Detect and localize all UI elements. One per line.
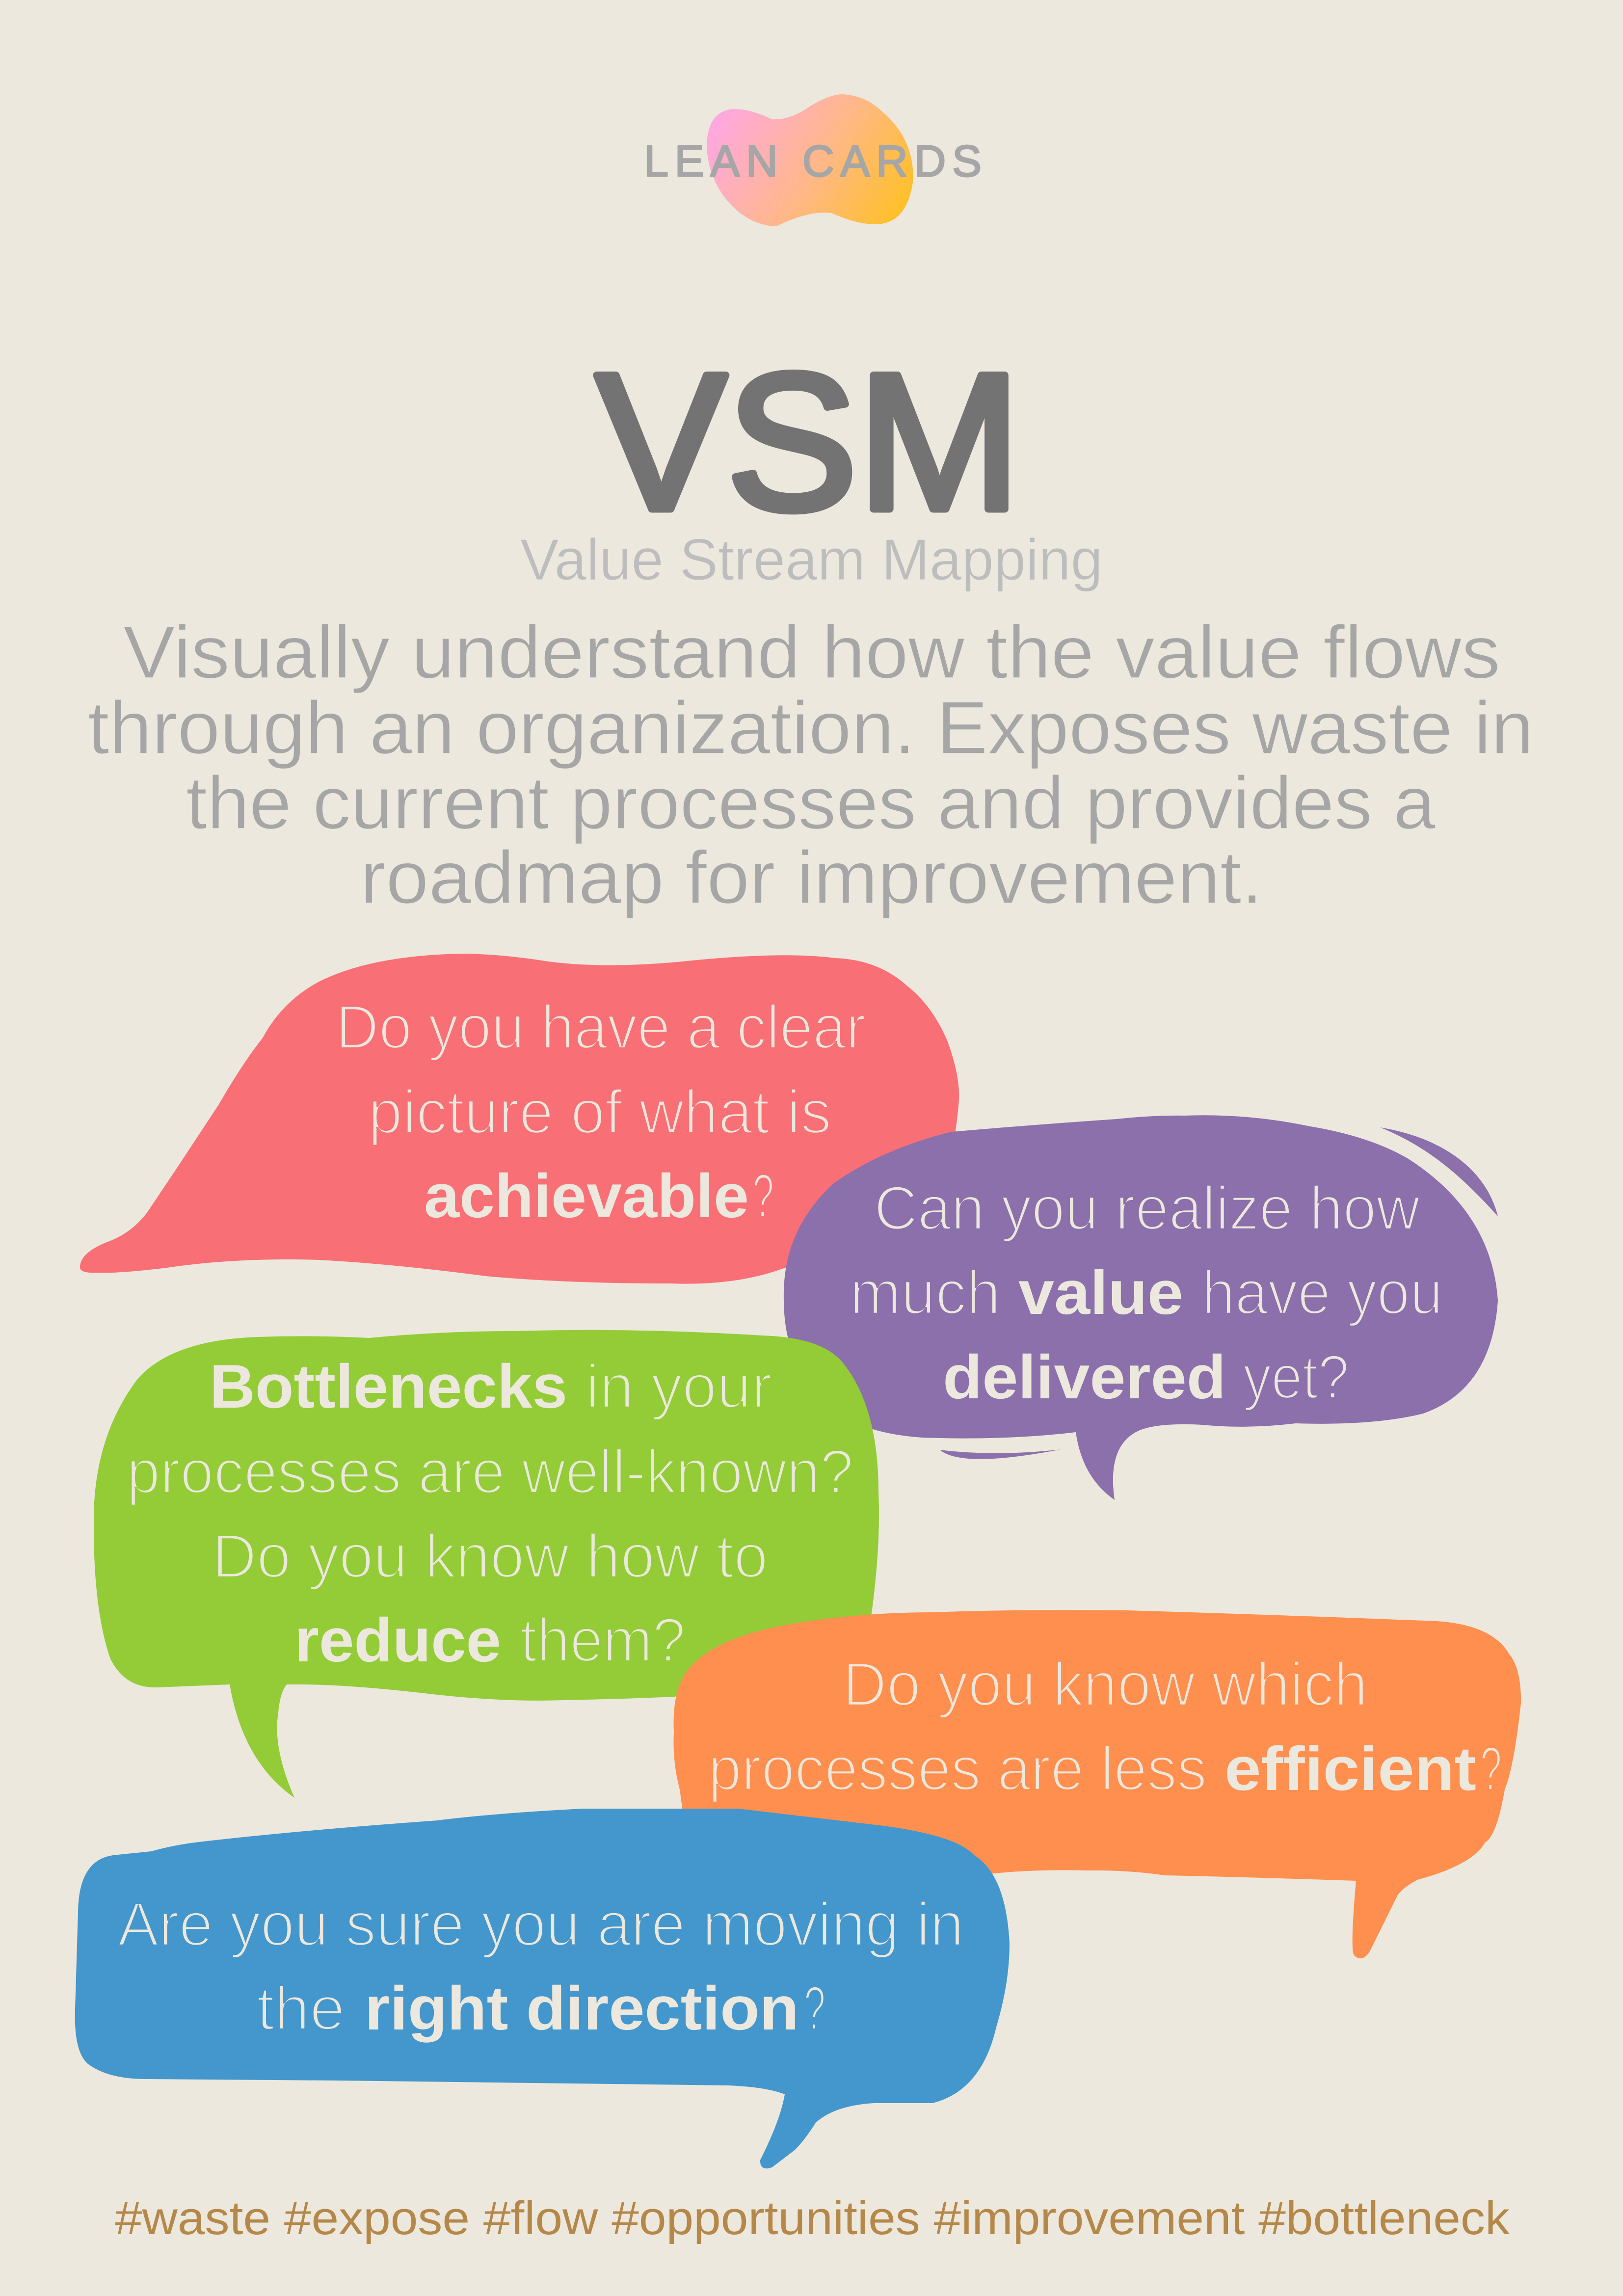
bubble shape: orange xyxy=(673,1610,1521,1958)
logo: lean cards xyxy=(644,94,982,226)
panel: green speech bubble xyxy=(94,1330,879,1798)
panel: orange speech bubble xyxy=(673,1610,1521,1958)
bubble text: achievable: ? xyxy=(752,1161,774,1230)
description paragraph: through an organization. Exposes waste in xyxy=(88,686,1534,770)
bubble text: efficient: ? xyxy=(1480,1734,1502,1803)
description paragraph: the current processes and provides a xyxy=(186,761,1436,845)
bubble text: bottlenecks: Bottlenecks xyxy=(210,1352,567,1421)
bubble text: bottlenecks: in your xyxy=(585,1352,772,1421)
bubble text: value delivered xyxy=(850,1174,1443,1412)
panel: blue speech bubble xyxy=(75,1809,1010,2168)
bubble text: efficient: processes are less xyxy=(708,1734,1207,1803)
bubble text: achievable: Do you have a clear xyxy=(336,992,866,1062)
bubble text: achievable: achievable xyxy=(424,1161,749,1230)
bubble shape: blue xyxy=(75,1809,1010,2168)
bubble text: value delivered: delivered xyxy=(943,1342,1226,1412)
bubble text: right direction: the xyxy=(257,1974,345,2043)
bubble text: right direction xyxy=(118,1890,964,2043)
bubble text: value delivered: Can you realize how xyxy=(874,1174,1420,1243)
bubble text: bottlenecks: reduce xyxy=(294,1605,501,1675)
bubble text: right direction: right direction xyxy=(365,1974,799,2043)
bubble text: efficient: efficient xyxy=(1224,1734,1476,1803)
bubble text: bottlenecks xyxy=(127,1352,853,1675)
bubble text: achievable: picture of what is xyxy=(368,1077,831,1147)
bubble shape: pink xyxy=(80,954,959,1284)
title: VSM xyxy=(596,333,1021,550)
bubble text: value delivered: have you xyxy=(1202,1258,1443,1327)
description paragraph: Visually understand how the value flows xyxy=(123,611,1500,694)
bubble text: achievable xyxy=(336,992,866,1230)
bubble shape: purple xyxy=(784,1115,1498,1500)
bubble text: bottlenecks: Do you know how to xyxy=(212,1522,768,1591)
decorative crescent top right xyxy=(1380,1127,1498,1216)
bubble text: right direction: Are you sure you are moving in xyxy=(118,1890,964,1959)
icon: gradient blob xyxy=(707,94,913,226)
bubble text: value delivered: value xyxy=(1018,1258,1183,1327)
bubble shape: green xyxy=(94,1330,879,1798)
description paragraph: roadmap for improvement. xyxy=(360,836,1263,919)
bubble text: right direction: ? xyxy=(804,1974,825,2043)
decorative crescent bottom xyxy=(940,1449,1061,1459)
panel: pink speech bubble xyxy=(80,954,959,1284)
subtitle: Value Stream Mapping xyxy=(520,527,1103,592)
bubble text: value delivered: much xyxy=(850,1258,1001,1327)
bubble text: efficient xyxy=(708,1650,1502,1803)
description paragraph xyxy=(88,611,1534,919)
panel: purple speech bubble xyxy=(784,1115,1498,1500)
bubble text: value delivered: yet? xyxy=(1243,1342,1349,1412)
bubble text: efficient: Do you know which xyxy=(843,1650,1368,1719)
logo wordmark: LEAN CARDS xyxy=(644,137,982,186)
bubble text: bottlenecks: them? xyxy=(520,1605,686,1675)
hashtags footer: #waste #expose #flow #opportunities #improvement #bottleneck xyxy=(115,2192,1510,2244)
bubble text: bottlenecks: processes are well-known? xyxy=(127,1437,853,1506)
